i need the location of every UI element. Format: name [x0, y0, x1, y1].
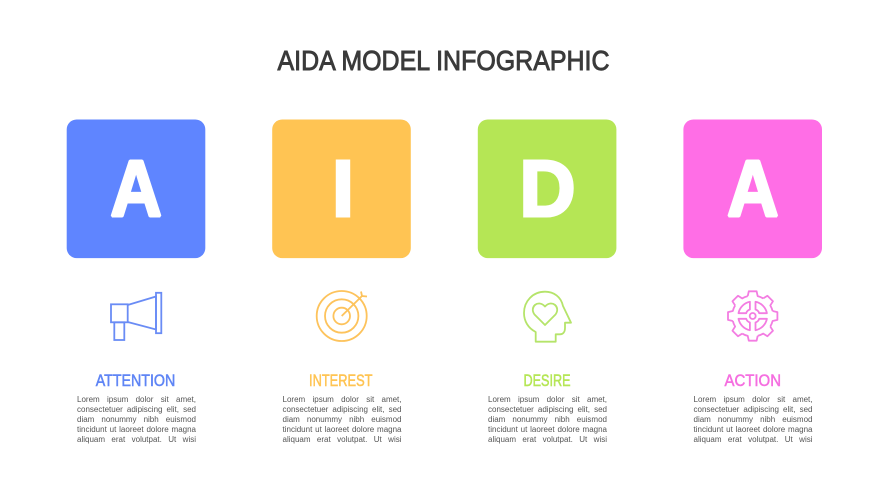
- text block: desire description: aliquam erat volutpat. Ut wisi: [488, 435, 607, 444]
- panel: A action square: [683, 120, 822, 258]
- text block: interest description: [282, 395, 402, 444]
- text block: action description: Lorem ipsum dolor sit amet,: [694, 395, 812, 404]
- icon: gear: [728, 291, 778, 341]
- text block: desire description: consectetuer adipiscing elit, sed: [488, 405, 607, 414]
- panel: A attention square: A: [110, 144, 162, 233]
- panel: I interest square: I: [332, 144, 354, 233]
- panel: I interest square: [272, 120, 411, 258]
- panel: A action square: A: [727, 144, 779, 233]
- title: AIDA MODEL INFOGRAPHIC: [278, 45, 610, 76]
- text block: desire description: diam nonummy nibh euismod: [488, 415, 607, 424]
- icon: target with arrow: [317, 291, 367, 341]
- text block: attention description: tincidunt ut laoreet dolore magna: [77, 425, 196, 434]
- text block: action description: tincidunt ut laoreet dolore magna: [694, 425, 812, 434]
- text block: attention description: [77, 395, 196, 444]
- text block: desire description: Lorem ipsum dolor sit amet,: [488, 395, 607, 404]
- text block: interest description: consectetuer adipiscing elit, sed: [282, 405, 402, 414]
- text block: action description: aliquam erat volutpat. Ut wisi: [694, 435, 812, 444]
- text block: action description: diam nonummy nibh euismod: [694, 415, 812, 424]
- text block: desire description: [488, 395, 607, 444]
- text block: action description: [694, 395, 812, 444]
- text block: attention description: aliquam erat volutpat. Ut wisi: [77, 435, 196, 444]
- text block: interest description: aliquam erat volutpat. Ut wisi: [282, 435, 402, 444]
- text block: attention description: Lorem ipsum dolor sit amet,: [77, 395, 196, 404]
- heading: attention: ATTENTION: [96, 371, 175, 390]
- icon: megaphone: [111, 293, 161, 340]
- text block: interest description: Lorem ipsum dolor sit amet,: [282, 395, 402, 404]
- icon: head with heart: [524, 292, 571, 342]
- heading: action: ACTION: [724, 371, 781, 390]
- panel: D desire square: [478, 120, 616, 258]
- heading: desire: DESIRE: [524, 371, 570, 390]
- text block: desire description: tincidunt ut laoreet dolore magna: [488, 425, 607, 434]
- text block: action description: consectetuer adipiscing elit, sed: [694, 405, 812, 414]
- text block: attention description: consectetuer adipiscing elit, sed: [77, 405, 196, 414]
- heading: interest: INTEREST: [309, 371, 372, 390]
- panel: A attention square: [67, 120, 205, 258]
- text block: attention description: diam nonummy nibh euismod: [77, 415, 196, 424]
- text block: interest description: diam nonummy nibh euismod: [282, 415, 402, 424]
- panel: D desire square: D: [520, 144, 576, 233]
- text block: interest description: tincidunt ut laoreet dolore magna: [282, 425, 402, 434]
